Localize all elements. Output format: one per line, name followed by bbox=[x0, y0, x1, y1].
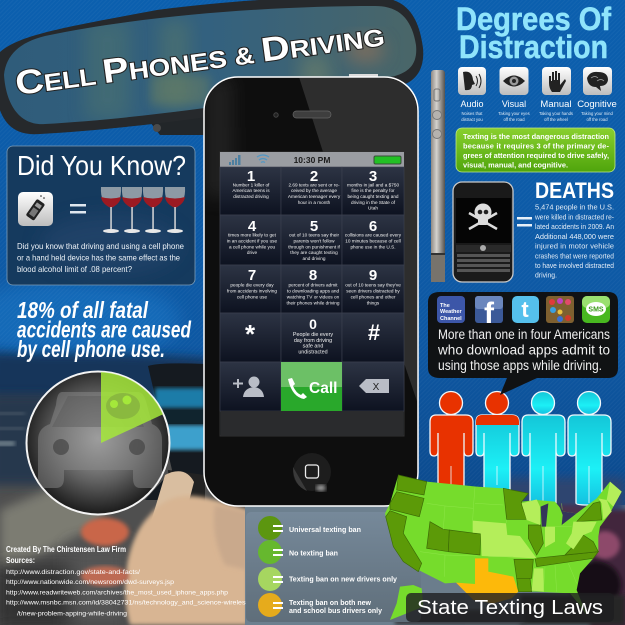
key 6: 10 minutes because of cell bbox=[345, 238, 401, 244]
key 8: percent of drivers admit bbox=[289, 282, 338, 288]
key 6: phone use in the U.S. bbox=[350, 244, 396, 250]
legend item: new drivers bbox=[258, 567, 398, 591]
heading: degrees of distraction: Distraction bbox=[459, 29, 608, 65]
key 8 bbox=[287, 267, 340, 306]
key 0 bbox=[293, 316, 333, 356]
equals sign bbox=[517, 217, 532, 226]
equals sign bbox=[70, 204, 86, 214]
speech bubble: apps bbox=[428, 292, 618, 395]
key 4: in an accident if you use bbox=[227, 238, 278, 244]
heading: degrees of distraction: Degrees Of bbox=[456, 1, 611, 37]
key 2: American teenager every bbox=[288, 194, 341, 199]
icon: weather channel: Channel bbox=[440, 316, 462, 322]
credits and sources: http://www.readwriteweb.com/archives/the_most_used_iphone_apps.php bbox=[6, 590, 228, 596]
key 0: undistracted bbox=[298, 350, 328, 356]
bubble text bbox=[437, 327, 610, 373]
key 2: ceived by the average bbox=[291, 188, 337, 193]
panel: did you know bbox=[7, 146, 195, 285]
icon: facebook: f bbox=[484, 297, 495, 330]
key 9: out of 10 teens say they've bbox=[345, 282, 401, 288]
key hash: # bbox=[368, 320, 380, 345]
key 5: out of 10 teens say their bbox=[289, 232, 339, 238]
icon group: manual bbox=[539, 67, 573, 122]
title: CELL PHONES & DRIVING bbox=[13, 15, 387, 103]
key 0: People die every bbox=[293, 332, 333, 338]
key 7: people die every day bbox=[230, 282, 274, 288]
key 3: fine is the penalty for bbox=[351, 188, 395, 193]
delete key bbox=[359, 379, 389, 393]
callout: texting is the most dangerous: Texting is the most dangerous distraction bbox=[463, 132, 609, 141]
delete key: X bbox=[373, 382, 380, 393]
icon group: manual: Manual bbox=[540, 99, 572, 110]
credits and sources: http://www.msnbc.msn.com/id/38042731/ns/technology_and_science-wireless bbox=[6, 600, 250, 606]
icon group: cognitive: Cognitive bbox=[577, 99, 617, 110]
credits and sources: http://www.distraction.gov/state-and-facts/ bbox=[6, 569, 140, 576]
icon: facebook bbox=[475, 296, 503, 330]
key 1: distracted driving bbox=[233, 194, 269, 199]
key 5: and driving bbox=[303, 256, 326, 261]
heading: Did You Know? bbox=[17, 150, 186, 181]
legend item: new and bus drivers: and school bus drivers only bbox=[289, 606, 383, 615]
add contact key bbox=[233, 376, 264, 397]
status bar: 10:30 PM bbox=[294, 155, 330, 165]
icon group: cognitive: Taking your mind bbox=[581, 111, 613, 116]
map of the United States bbox=[385, 475, 622, 620]
key 8: 8 bbox=[309, 267, 317, 284]
legend item: universal bbox=[258, 516, 361, 540]
icon group: cognitive: off the road bbox=[586, 117, 608, 122]
side view of phone bbox=[431, 70, 445, 282]
speaker and camera bbox=[274, 111, 331, 118]
icon: sms bbox=[582, 296, 610, 323]
key 6: 6 bbox=[369, 218, 377, 235]
text block bbox=[17, 241, 184, 274]
legend item: universal: Universal texting ban bbox=[289, 525, 361, 534]
key 9: things bbox=[367, 300, 380, 306]
map label: state texting laws: State Texting Laws bbox=[417, 597, 603, 619]
credits and sources: Created By The Chirstensen Law Firm bbox=[6, 545, 126, 554]
icon group: visual: off the road bbox=[503, 117, 525, 122]
call key: Call bbox=[309, 380, 337, 397]
icon: car bbox=[38, 392, 162, 488]
icon: game bbox=[546, 296, 574, 323]
screen bbox=[220, 152, 404, 436]
key 2: 2 bbox=[310, 168, 318, 185]
key 7: from accidents involving bbox=[227, 288, 277, 294]
call key bbox=[281, 362, 342, 411]
deaths block: Additional 448,000 were bbox=[535, 232, 614, 241]
key 8: watching TV or videos on bbox=[287, 294, 340, 300]
icon: weather channel: Weather bbox=[440, 309, 462, 315]
icon group: cognitive bbox=[577, 67, 617, 122]
land bbox=[385, 475, 622, 615]
legend item: none: No texting ban bbox=[289, 548, 338, 558]
callout: texting is the most dangerous: grees of attention required to drive safely, bbox=[463, 151, 609, 160]
statistic: 18 percent: 18% of all fatal bbox=[17, 297, 148, 323]
callout: texting is the most dangerous bbox=[456, 128, 615, 172]
text block: blood alcohol limit of .08 percent? bbox=[17, 264, 132, 274]
photo: dark road scene behind legend and map bbox=[245, 478, 625, 625]
legend item: none bbox=[258, 540, 338, 564]
people figures bbox=[430, 392, 611, 505]
callout: texting is the most dangerous: visual, manual, and cognitive. bbox=[463, 160, 568, 170]
states: texas bbox=[456, 558, 518, 603]
key 6: collisions are caused every bbox=[345, 232, 402, 238]
person cyan bbox=[522, 392, 565, 505]
text block: Did you know that driving and using a cell phone bbox=[17, 241, 184, 251]
key 3: Utah bbox=[368, 206, 378, 210]
legend item: new and bus drivers bbox=[258, 593, 383, 617]
icon group: visual bbox=[498, 67, 530, 122]
key 4 bbox=[227, 218, 278, 255]
key 1: Number 1 killer of bbox=[233, 182, 270, 188]
states: new driver ban (light) bbox=[473, 482, 622, 592]
icon group: manual: Taking your hands bbox=[539, 111, 573, 116]
key 4: a cell phone while you bbox=[229, 244, 275, 250]
heading: degrees of distraction bbox=[456, 1, 611, 65]
key 9: cell phones and other bbox=[351, 294, 396, 300]
icon: blackberry with skull bbox=[453, 182, 513, 282]
bubble text: who download apps admit to bbox=[437, 342, 610, 358]
key 9 bbox=[345, 267, 401, 306]
key star: * bbox=[245, 319, 256, 349]
person cyan bbox=[568, 392, 611, 505]
phone bbox=[204, 74, 420, 506]
deaths block: to have involved distracted bbox=[535, 261, 614, 270]
icon: weather channel bbox=[437, 296, 465, 323]
key 5: 5 bbox=[310, 218, 318, 235]
keypad cell backgrounds bbox=[220, 167, 404, 411]
icon: sms: SMS bbox=[588, 306, 604, 314]
icon group: audio: Noises that bbox=[462, 111, 483, 116]
key 5: parents won't follow bbox=[293, 238, 335, 244]
key 3: being caught texting and bbox=[347, 194, 399, 199]
key 0: 0 bbox=[309, 316, 317, 332]
statistic: 18 percent: accidents are caused bbox=[17, 316, 192, 342]
person partly red bbox=[476, 392, 519, 505]
icon: twitter: t bbox=[521, 297, 529, 322]
key 5: they are caught texting bbox=[290, 250, 338, 255]
key 1: American teens is bbox=[232, 188, 270, 193]
credits and sources: http://www.nationwide.com/newsroom/dwd-surveys.jsp bbox=[6, 579, 174, 586]
credits and sources bbox=[6, 545, 250, 618]
legend item: new and bus drivers: Texting ban on both new bbox=[289, 598, 371, 607]
text block: or a hand held device has the same effect as the bbox=[17, 252, 180, 262]
icon: weather channel: The bbox=[440, 303, 450, 309]
icon: cell phone bbox=[18, 192, 53, 226]
statistic: 18 percent: by cell phone use. bbox=[17, 336, 165, 362]
key 1: 1 bbox=[247, 168, 255, 185]
key 3: driving in the State of bbox=[351, 200, 396, 205]
deaths block: DEATHS bbox=[535, 178, 614, 203]
icon: twitter bbox=[512, 296, 539, 323]
callout: texting is the most dangerous: because it requires 3 of the primary de- bbox=[463, 142, 610, 150]
deaths block: 5,474 people in the U.S. bbox=[535, 202, 614, 212]
deaths block: injured in motor vehicle bbox=[535, 242, 614, 250]
deaths block: lated accidents in 2009. An bbox=[535, 222, 614, 231]
legend item: new drivers: Texting ban on new drivers only bbox=[289, 574, 398, 584]
key 2: hour in a month bbox=[298, 200, 331, 205]
key 5 bbox=[288, 218, 340, 261]
key 1 bbox=[232, 168, 270, 199]
great lakes bbox=[541, 503, 577, 527]
radar circle with car bbox=[26, 368, 170, 514]
key 5: through on punishment if bbox=[288, 244, 340, 250]
bubble text: using those apps while driving. bbox=[438, 358, 602, 373]
deaths block bbox=[534, 178, 614, 280]
key 4: 4 bbox=[248, 218, 257, 235]
icon group: audio: distract you bbox=[461, 117, 483, 122]
key 7: cell phone use bbox=[237, 294, 268, 300]
key 3: 3 bbox=[369, 168, 377, 185]
icon group: manual: off the wheel bbox=[544, 117, 568, 122]
key 9: seen drivers distracted by bbox=[346, 288, 400, 294]
icon group: visual: Taking your eyes bbox=[498, 111, 530, 116]
map label: state texting laws bbox=[406, 593, 614, 622]
key texts bbox=[227, 168, 402, 356]
key 3: months in jail and a $750 bbox=[347, 182, 399, 188]
state: alaska bbox=[390, 585, 423, 620]
icon: wine glasses bbox=[101, 187, 185, 233]
key 4: times more likely to get bbox=[228, 232, 277, 238]
key 9: 9 bbox=[369, 267, 377, 284]
credits and sources: Sources: bbox=[6, 556, 35, 565]
deaths block: were killed in distracted re- bbox=[534, 212, 614, 222]
status bar bbox=[220, 152, 404, 167]
icon group: audio: Audio bbox=[460, 99, 484, 109]
key 6 bbox=[345, 218, 402, 250]
skull bbox=[469, 204, 497, 229]
green radar sector bbox=[101, 372, 163, 443]
key 0: day from driving bbox=[294, 338, 332, 344]
icon group: audio bbox=[458, 67, 486, 122]
key 3 bbox=[347, 168, 399, 210]
deaths block: crashes that were reported bbox=[535, 252, 614, 260]
mirror bbox=[0, 0, 423, 135]
key 0: safe and bbox=[303, 344, 323, 350]
panel: map legend bbox=[246, 512, 421, 622]
home button bbox=[293, 453, 331, 491]
icon group: visual: Visual bbox=[502, 99, 526, 109]
states: universal ban (dark) bbox=[386, 475, 610, 592]
state borders bbox=[420, 487, 577, 592]
key 2 bbox=[288, 168, 341, 205]
key 8: their phones while driving bbox=[287, 300, 340, 306]
key 7: 7 bbox=[248, 267, 256, 284]
credits and sources: /t/new-problem-apping-while-driving bbox=[17, 610, 127, 618]
person red bbox=[430, 392, 473, 505]
key 2: 2.69 texts are sent or re- bbox=[288, 182, 340, 188]
key 4: drive bbox=[247, 250, 257, 255]
statistic: 18 percent bbox=[17, 297, 192, 362]
key 8: to downloading apps and bbox=[287, 288, 339, 294]
key 7 bbox=[227, 267, 277, 300]
deaths block: driving. bbox=[535, 270, 557, 280]
photo: car interior and hand bbox=[0, 352, 260, 625]
